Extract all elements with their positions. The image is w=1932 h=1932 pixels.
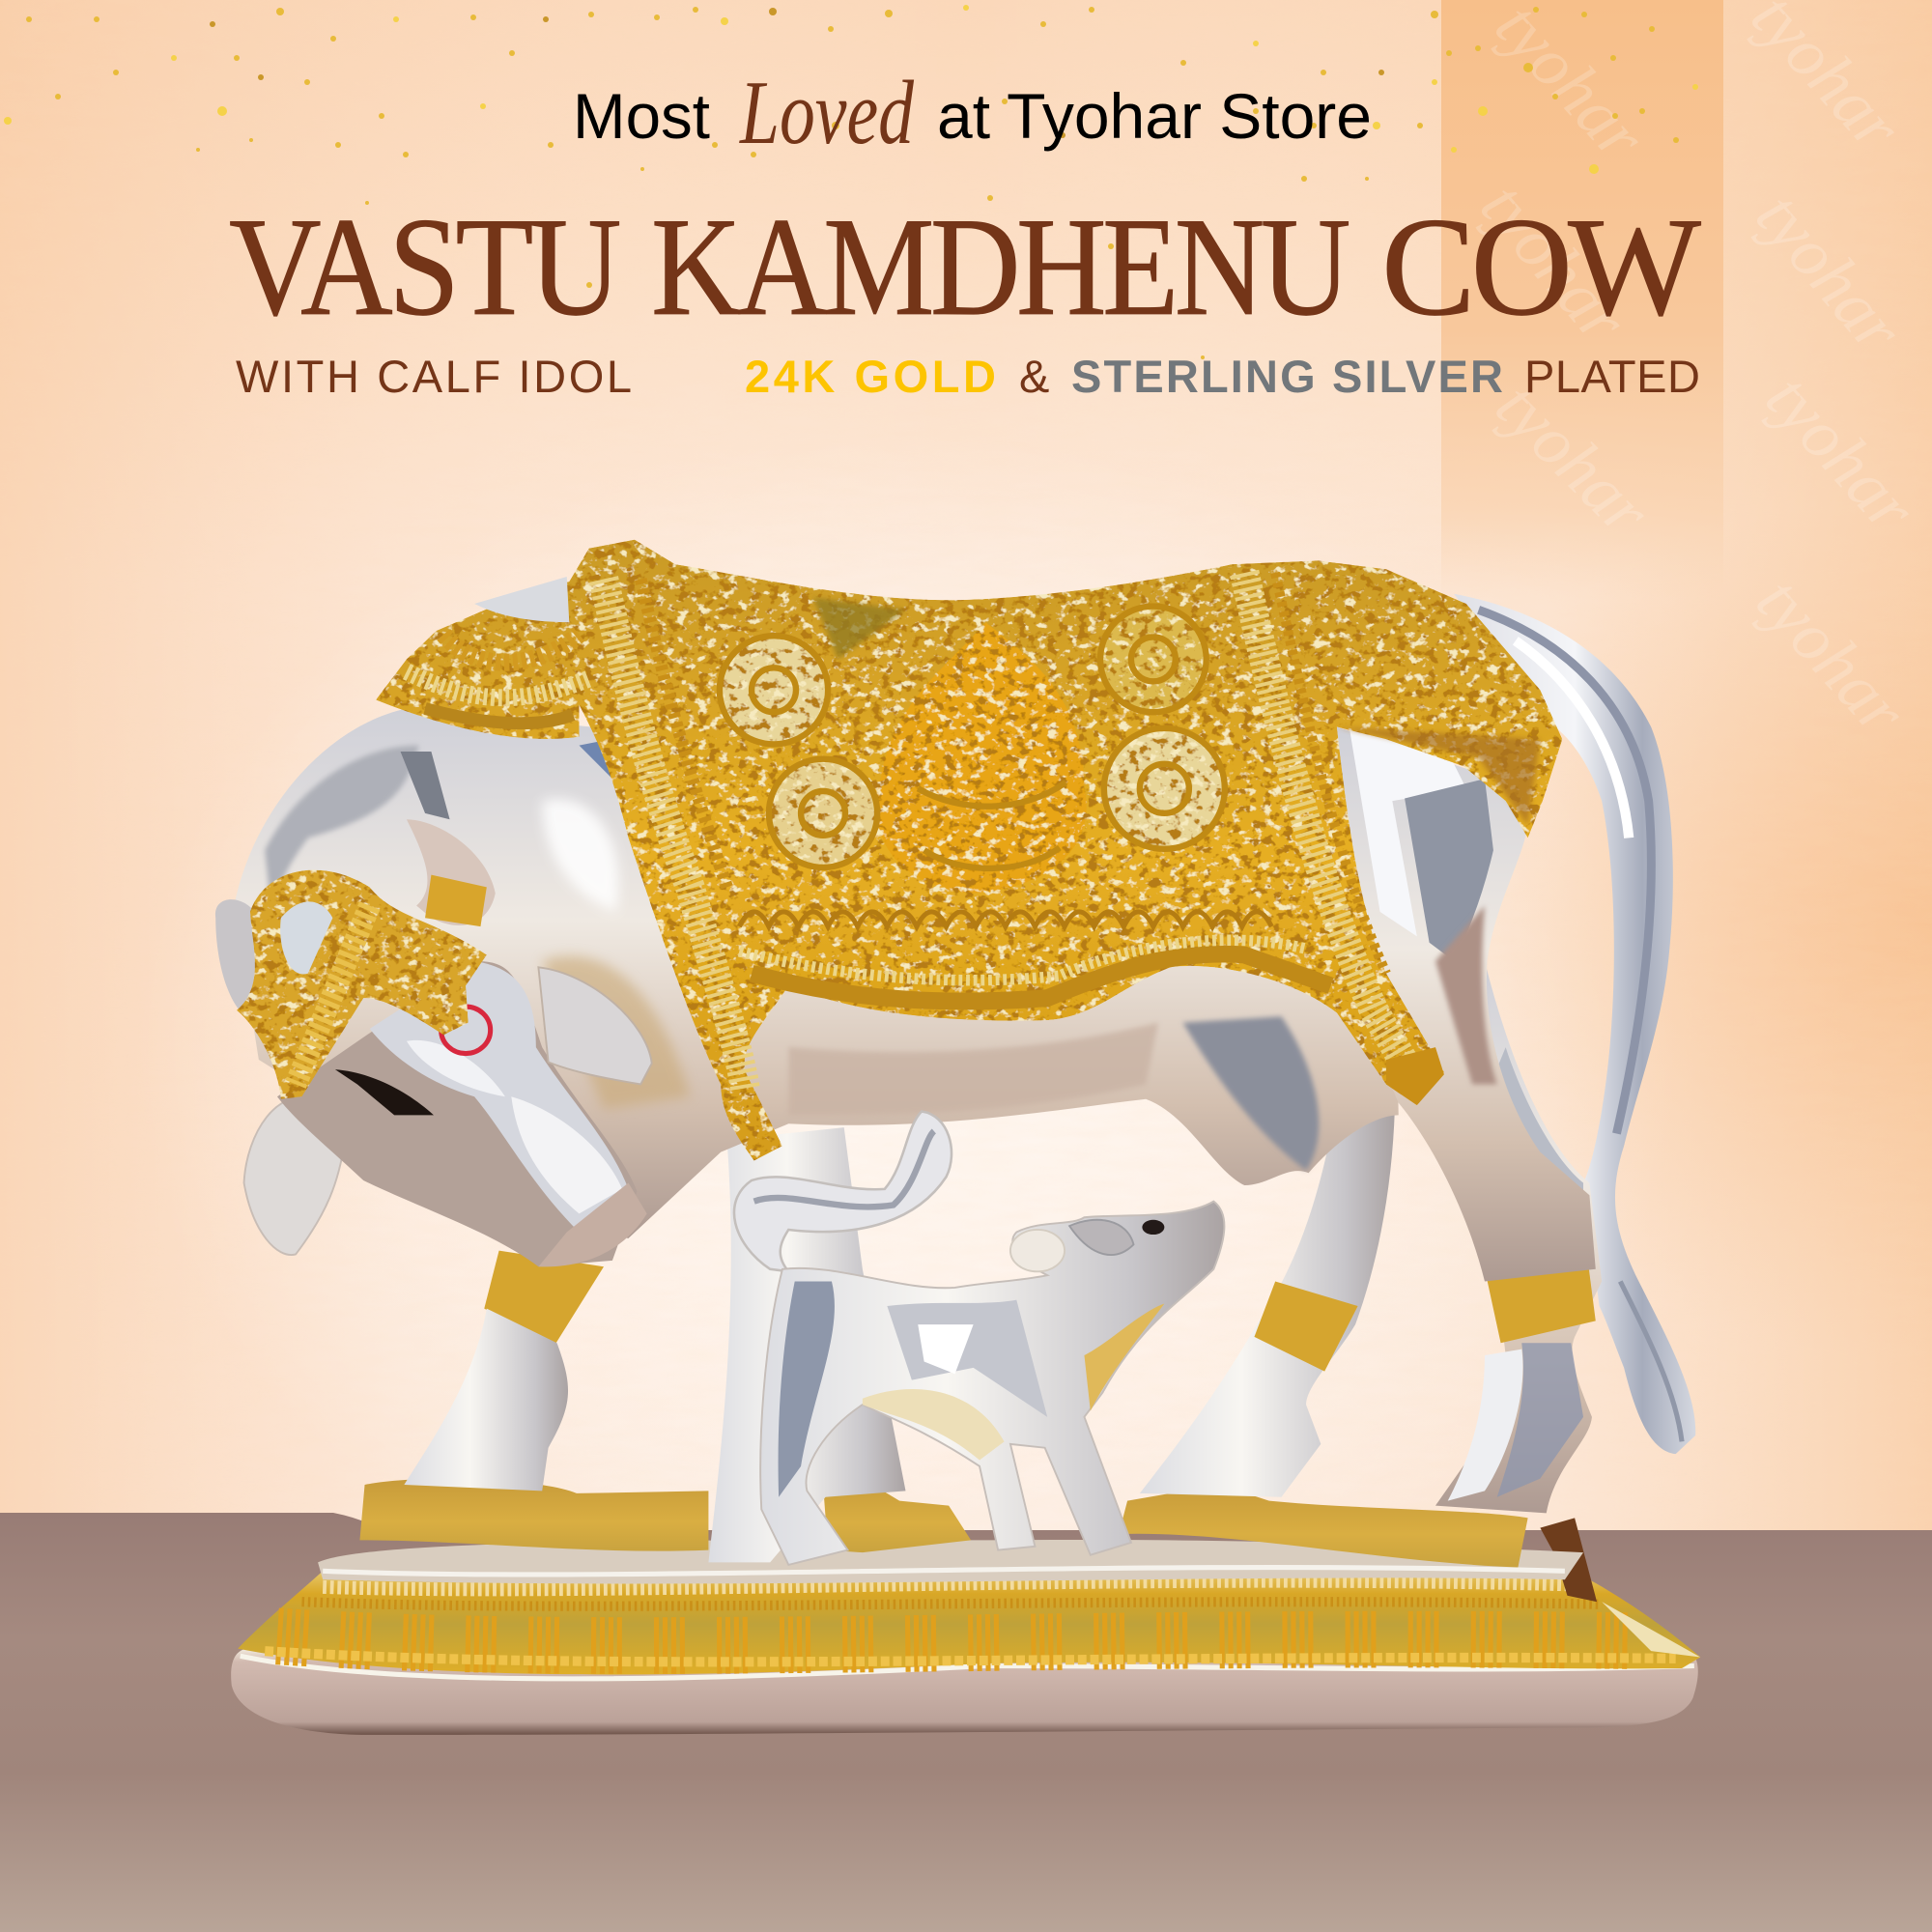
gold glitter speckles (4, 5, 1698, 359)
heading: most loved at tyohar store: Loved (738, 63, 915, 163)
subtitle (236, 351, 1700, 402)
watermark: tyohar: tyohar (1466, 168, 1642, 357)
tail (1454, 594, 1695, 1454)
title: vastu kamdhenu cow: COW (1381, 188, 1701, 345)
rear legs (1140, 961, 1602, 1513)
blanket medallions (720, 607, 1225, 894)
collar ridges (425, 708, 573, 724)
front legs (404, 1127, 905, 1562)
torso reflections (265, 739, 1319, 1171)
watermark: tyohar (1466, 0, 1931, 750)
gold head band and horn (237, 819, 496, 1099)
watermark: tyohar: tyohar (1742, 178, 1918, 367)
gold hoof blocks (359, 1479, 1528, 1567)
calf (734, 1112, 1224, 1565)
title: vastu kamdhenu cow: VASTU (229, 188, 619, 345)
silver window under hump (474, 577, 569, 622)
rump silver (1337, 727, 1596, 1282)
heading: most loved at tyohar store (573, 63, 1372, 163)
watermark: tyohar: tyohar (1742, 562, 1921, 750)
blanket side borders (604, 579, 746, 1091)
statue plinth top (318, 1540, 1583, 1584)
statue base plate (231, 1649, 1698, 1735)
watermark: tyohar: tyohar (1482, 367, 1665, 551)
floor (0, 1513, 1932, 1932)
cow head (215, 899, 652, 1266)
subtitle: & (1019, 351, 1049, 402)
blanket cloth (376, 540, 1562, 1161)
statue: cow and calf (215, 540, 1700, 1735)
blanket scalloped lower border (739, 912, 1271, 926)
subtitle: PLATED (1524, 351, 1700, 402)
gold leg bands (484, 1251, 1596, 1372)
gold blanket (376, 540, 1562, 1161)
title: vastu kamdhenu cow (229, 188, 1701, 345)
title: vastu kamdhenu cow: KAMDHENU (651, 188, 1349, 345)
cow torso silver (234, 708, 1399, 1238)
subtitle: STERLING SILVER (1071, 351, 1503, 402)
subtitle: WITH CALF IDOL (236, 351, 632, 402)
statue gold frieze (238, 1518, 1700, 1674)
heading: most loved at tyohar store: at Tyohar Store (937, 80, 1372, 152)
medallion rings (720, 607, 1225, 868)
subtitle: 24K GOLD (745, 351, 996, 402)
heading: most loved at tyohar store: Most (573, 80, 710, 152)
watermark: tyohar: tyohar (1751, 359, 1931, 547)
